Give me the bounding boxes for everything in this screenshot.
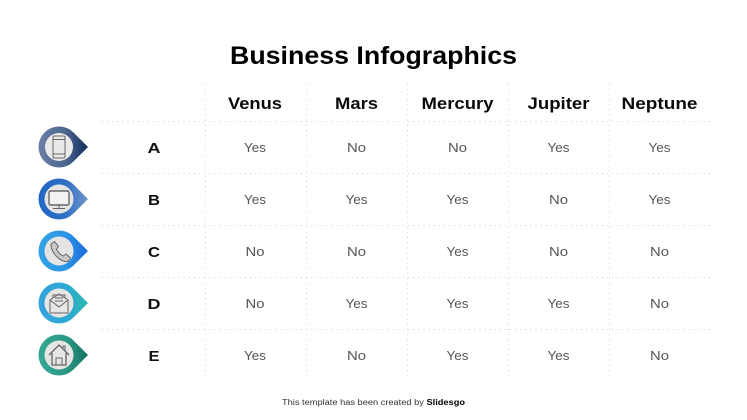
icon: open envelope — [39, 282, 88, 323]
row C — [39, 230, 669, 272]
row D: Yes — [446, 296, 469, 311]
row B: Yes — [346, 192, 368, 207]
row D: No — [246, 296, 264, 311]
row C: No — [347, 244, 366, 259]
column headers — [228, 94, 698, 113]
row B: Yes — [244, 192, 267, 207]
row E: Yes — [244, 348, 267, 363]
row C: No — [246, 244, 264, 259]
row B: Yes — [446, 192, 469, 207]
row A: Yes — [244, 140, 267, 155]
row E: Yes — [548, 348, 570, 363]
row C: C — [148, 244, 160, 261]
icon: monitor — [39, 179, 88, 220]
row E: No — [650, 348, 669, 363]
row C: Yes — [446, 244, 469, 259]
row E: No — [347, 348, 366, 363]
row E: E — [148, 348, 160, 365]
row A: Yes — [548, 140, 570, 155]
column headers: Venus — [228, 94, 282, 113]
icon: phone — [39, 230, 88, 272]
row B — [39, 179, 671, 220]
row A: No — [347, 140, 366, 155]
row D: D — [148, 296, 161, 313]
row B: No — [549, 192, 568, 207]
row D: Yes — [548, 296, 570, 311]
row E — [39, 334, 669, 376]
footer credit: This template has been created by Slidesgo — [282, 398, 465, 407]
row A: No — [448, 140, 467, 155]
table grid — [102, 84, 710, 380]
row A: A — [148, 140, 161, 157]
row C: No — [650, 244, 669, 259]
icon: house — [39, 334, 88, 376]
row D — [39, 282, 669, 323]
row A: Yes — [648, 140, 671, 155]
row A — [39, 126, 671, 167]
title: Business Infographics — [230, 42, 517, 70]
row D: Yes — [346, 296, 368, 311]
column headers: Jupiter — [528, 94, 590, 113]
column headers: Mercury — [422, 94, 494, 113]
row D: No — [650, 296, 669, 311]
row E: Yes — [446, 348, 469, 363]
row C: No — [549, 244, 568, 259]
column headers: Mars — [335, 94, 378, 113]
row B: B — [148, 192, 160, 209]
column headers: Neptune — [622, 94, 698, 113]
row B: Yes — [648, 192, 671, 207]
icon: smartphone — [39, 126, 88, 167]
